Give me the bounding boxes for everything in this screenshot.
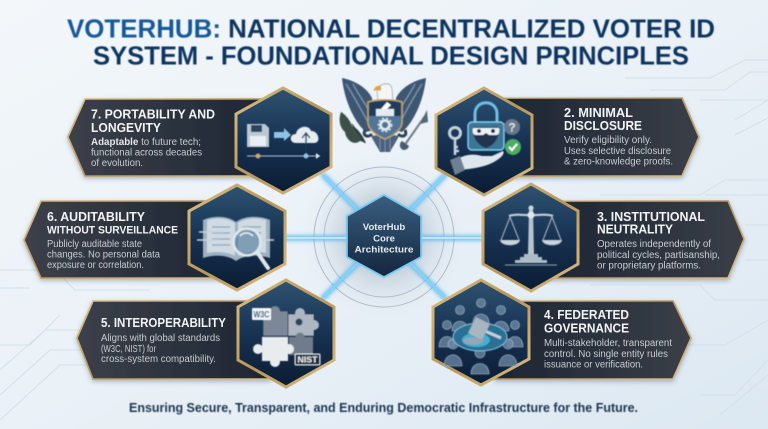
panel body <box>500 98 699 176</box>
icon: puzzle pieces with W3C and NIST labels: W3C <box>254 310 270 320</box>
panel body <box>24 201 230 278</box>
hexagon badge <box>236 88 331 193</box>
description: Publicly auditable state <box>47 239 142 250</box>
panel body <box>495 301 691 379</box>
description: Uses selective disclosure <box>564 146 671 157</box>
central hexagon: VoterHub Core Architecture: VoterHub <box>363 222 405 233</box>
heading: 7. PORTABILITY AND <box>91 106 215 122</box>
description: cross-system compatibility. <box>101 354 216 365</box>
heading: GOVERNANCE <box>544 320 629 336</box>
heading: 6. AUDITABILITY <box>47 209 145 224</box>
panel: 3. Institutional Neutrality <box>483 184 744 291</box>
panel body <box>545 201 744 278</box>
hexagon badge <box>433 280 529 385</box>
heading: NEUTRALITY <box>597 222 673 236</box>
heading <box>564 105 642 133</box>
connector lines from core to principles <box>285 175 483 298</box>
icon: balance scales <box>500 205 562 265</box>
panel body <box>77 301 270 379</box>
heading: 4. FEDERATED <box>544 307 629 322</box>
central glow and concentric rings <box>296 149 472 325</box>
description <box>544 338 672 370</box>
panel body <box>68 99 270 176</box>
description: changes. No personal data <box>47 250 160 260</box>
heading <box>91 106 215 135</box>
icon: lock, key, question, check, hand <box>450 103 521 175</box>
description: or proprietary platforms. <box>597 260 701 272</box>
description: political cycles, partisanship, <box>597 250 720 261</box>
heading <box>597 209 705 236</box>
central hexagon: VoterHub Core Architecture <box>347 195 421 277</box>
description: functional across decades <box>91 148 202 158</box>
hexagon badge <box>189 185 285 290</box>
panel: 6. Auditability without Surveillance <box>24 185 285 290</box>
description: Multi-stakeholder, transparent <box>544 338 672 349</box>
panel: 5. Interoperability <box>77 280 334 387</box>
panel: 7. Portability and Longevity <box>68 88 331 193</box>
description: & zero-knowledge proofs. <box>564 156 673 168</box>
description: control. No single entity rules <box>544 349 668 360</box>
icon: puzzle pieces with W3C and NIST labels: NIST <box>298 354 318 364</box>
heading: WITHOUT SURVEILLANCE <box>47 224 178 236</box>
heading: 5. INTEROPERABILITY <box>101 315 226 330</box>
description: issuance or verification. <box>544 360 643 370</box>
heading: LONGEVITY <box>91 120 161 135</box>
footer tagline: Ensuring Secure, Transparent, and Enduring Democratic Infrastructure for the Future. <box>129 400 638 415</box>
icon: stakeholders around table with gavel <box>439 298 523 374</box>
description: Operates independently of <box>597 239 711 250</box>
heading: DISCLOSURE <box>564 118 642 133</box>
heading: 2. MINIMAL <box>564 105 633 120</box>
heading: 3. INSTITUTIONAL <box>597 209 705 224</box>
title: SYSTEM - FOUNDATIONAL DESIGN PRINCIPLES <box>93 40 689 70</box>
heading <box>544 307 629 336</box>
description <box>564 135 673 168</box>
icon: lock, key, question, check, hand: ? <box>508 120 516 134</box>
central hexagon: VoterHub Core Architecture: Architecture <box>354 244 414 256</box>
title: VOTERHUB: NATIONAL DECENTRALIZED VOTER ID <box>67 14 715 44</box>
hexagon badge <box>436 88 532 195</box>
description: Adaptable to future tech; <box>91 137 201 148</box>
central hexagon: VoterHub Core Architecture: Core <box>373 234 395 244</box>
description: Verify eligibility only. <box>564 135 652 146</box>
description <box>101 333 220 365</box>
description: Aligns with global standards <box>101 333 220 344</box>
hexagon badge <box>483 184 578 291</box>
icon: puzzle pieces with W3C and NIST labels <box>252 306 320 367</box>
description: exposure or correlation. <box>47 260 144 271</box>
description <box>47 239 160 271</box>
icon: eagle seal <box>340 78 428 152</box>
description: (W3C, NIST) for <box>101 344 157 355</box>
description <box>91 137 202 169</box>
title <box>67 14 715 70</box>
hexagon badge <box>238 280 334 387</box>
icon: floppy, arrow, cloud, timeline <box>247 124 320 159</box>
heading <box>47 209 178 236</box>
panel: 4. Federated Governance <box>433 280 691 385</box>
panel: 2. Minimal Disclosure <box>436 88 699 195</box>
description <box>597 239 720 272</box>
icon: open book and magnifier <box>197 217 274 268</box>
description: of evolution. <box>91 158 143 169</box>
